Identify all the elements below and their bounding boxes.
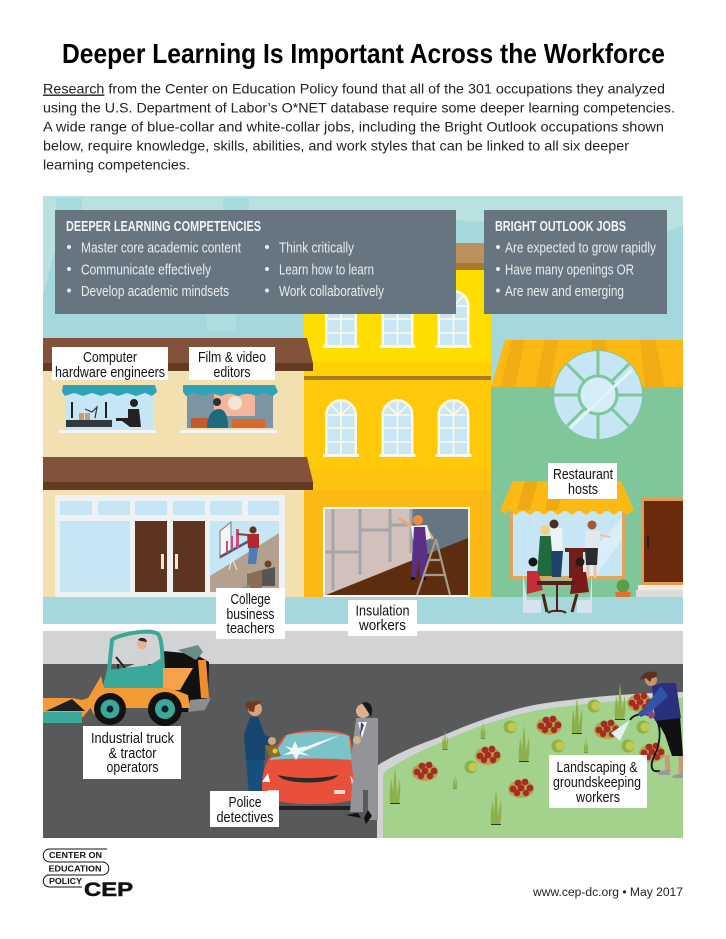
ladder: [417, 539, 450, 595]
torso: [652, 683, 681, 721]
rear bucket: [160, 645, 211, 712]
upper windows: [323, 290, 472, 348]
plants: [390, 683, 665, 825]
legs and shoes: [667, 755, 681, 773]
garden: [377, 683, 683, 838]
label: computer hardware engineers: hardware engineers: [55, 364, 165, 381]
label: restaurant hosts: hosts: [568, 481, 598, 498]
label: insulation workers: [348, 600, 417, 636]
driver: [115, 638, 148, 669]
label: industrial truck and tractor operators: operators: [106, 759, 158, 776]
round window: [553, 350, 643, 440]
worker: [398, 515, 433, 580]
intro text block: Research from the Center on Education Policy found that all of the 301 occupations they analyzed: [43, 80, 665, 96]
restaurant awning: [500, 481, 634, 515]
label: police detectives: Police: [228, 794, 262, 811]
panel: deeper learning competencies: Master core academic content: [81, 240, 242, 256]
plant: [615, 580, 631, 597]
label: landscaping and groundskeeping workers: [549, 755, 647, 808]
panel: deeper learning competencies: Learn how to learn: [279, 262, 374, 278]
cab: [108, 632, 163, 680]
label: insulation workers: Insulation: [356, 602, 410, 620]
label: college business teachers: teachers: [226, 620, 274, 637]
label: industrial truck and tractor operators: Industrial truck: [91, 730, 174, 747]
label: landscaping and groundskeeping workers: workers: [575, 789, 620, 806]
wheels: [94, 692, 182, 726]
CEP logo: CEP: [84, 879, 133, 901]
storefront: [55, 495, 285, 597]
street scene illustration: [43, 196, 683, 838]
label: police detectives: detectives: [216, 809, 274, 826]
panel: deeper learning competencies: Develop academic mindsets: [81, 283, 229, 300]
label: landscaping and groundskeeping workers: Landscaping &: [556, 759, 638, 776]
intro text block: [43, 80, 675, 172]
red car: [262, 730, 357, 810]
intro text block: using the U.S. Department of Labor’s O*NET database require some deeper learning competencies.: [43, 100, 675, 116]
label: restaurant hosts: [548, 463, 617, 499]
yellow building: [304, 243, 491, 597]
panel: deeper learning competencies: [55, 210, 456, 314]
panel: deeper learning competencies: Communicate effectively: [81, 262, 211, 278]
label: college business teachers: business: [226, 606, 274, 623]
panel: bright outlook jobs: Have many openings OR: [505, 262, 634, 278]
CEP logo: CENTER ON: [49, 851, 102, 860]
tractor: [43, 632, 211, 726]
hose: [630, 714, 660, 771]
panel: deeper learning competencies: Work collaboratively: [279, 283, 384, 300]
panel: bright outlook jobs: Are new and emerging: [505, 283, 624, 300]
sky: [43, 196, 683, 396]
door: [636, 498, 683, 597]
label: computer hardware engineers: Computer: [83, 349, 137, 366]
intro text block: learning competencies.: [43, 156, 190, 172]
intro text block: A wide range of blue-collar and white-collar jobs, including the Bright Outlook occupations shown: [43, 118, 664, 134]
label: industrial truck and tractor operators: & tractor: [108, 745, 156, 762]
label: film and video editors: Film & video: [198, 349, 266, 366]
panel: bright outlook jobs: Are expected to grow rapidly: [505, 240, 656, 256]
intro text block: below, require knowledge, skills, abilities, and work styles that can be linked to all six deeper: [43, 138, 629, 154]
lower windows: [323, 399, 472, 457]
restaurant patrons and hosts: [523, 520, 610, 613]
badge: [265, 737, 281, 758]
label: industrial truck and tractor operators: [83, 726, 181, 779]
label: landscaping and groundskeeping workers: groundskeeping: [553, 774, 641, 791]
restaurant window: [510, 511, 625, 580]
police detective woman: [244, 701, 275, 795]
front bucket: [43, 698, 92, 723]
shorts: [658, 718, 683, 756]
water spray: [611, 720, 630, 741]
label: police detectives: [210, 791, 279, 827]
insulation worker scene: [323, 507, 470, 597]
green restaurant building: [491, 340, 683, 605]
panel: bright outlook jobs: [484, 210, 667, 314]
CEP logo: POLICY: [49, 877, 83, 886]
panel: deeper learning competencies: DEEPER LEARNING COMPETENCIES: [66, 219, 261, 235]
label: insulation workers: workers: [358, 617, 406, 634]
gardener: [611, 672, 683, 778]
label: computer hardware engineers: [52, 347, 168, 381]
label: restaurant hosts: Restaurant: [553, 466, 614, 483]
CEP logo: [43, 849, 133, 901]
label: college business teachers: [216, 588, 285, 639]
label: film and video editors: editors: [214, 364, 250, 381]
film editor window: [180, 385, 278, 433]
sidewalk and road: [43, 597, 683, 838]
computer hardware engineer window: [59, 385, 157, 433]
panel: bright outlook jobs: BRIGHT OUTLOOK JOBS: [495, 219, 626, 235]
CEP logo: EDUCATION: [48, 864, 102, 874]
panel: deeper learning competencies: Think critically: [279, 240, 354, 256]
tractor body: [87, 676, 190, 715]
label: college business teachers: College: [230, 591, 270, 608]
head: [645, 676, 657, 686]
footer source: www.cep-dc.org • May 2017: [532, 887, 683, 899]
label: film and video editors: [189, 347, 275, 381]
college classroom scene: [210, 521, 279, 592]
left tan building: [43, 338, 313, 597]
male detective: [345, 702, 378, 824]
